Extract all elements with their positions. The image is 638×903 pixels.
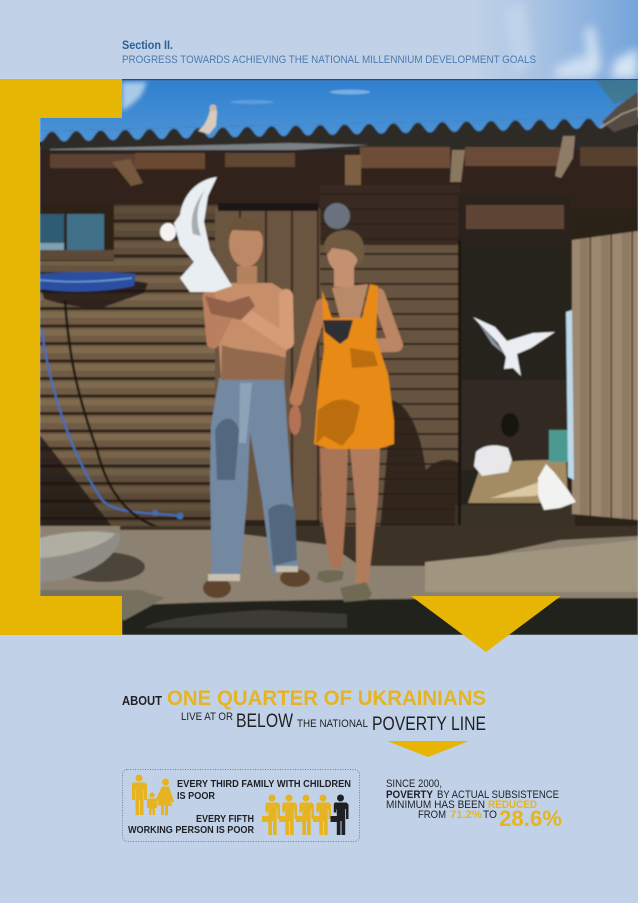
yellow bracket frame	[0, 79, 122, 635]
doorway interior	[455, 195, 575, 527]
text block: poverty reduction: POVERTY	[386, 789, 434, 801]
panel: poverty statistics: WORKING PERSON IS POOR	[128, 824, 254, 836]
doves on the floor	[474, 413, 576, 510]
torso	[213, 282, 288, 378]
head	[334, 262, 354, 287]
headline	[122, 687, 486, 735]
man	[203, 217, 310, 598]
small yellow arrow	[387, 741, 469, 757]
header band with sky fade	[0, 0, 638, 79]
text block: poverty reduction: MINIMUM HAS BEEN	[386, 799, 485, 811]
basin	[40, 531, 145, 582]
log wall left	[40, 205, 218, 535]
left dove held aloft	[160, 177, 232, 292]
corrugated roof	[30, 92, 638, 153]
section heading: Section II.	[122, 40, 173, 52]
ground	[40, 526, 638, 635]
dress	[314, 284, 394, 449]
headline: LIVE AT OR	[181, 711, 233, 723]
text block: poverty reduction	[386, 778, 562, 831]
text block: poverty reduction: 28.6%	[499, 806, 562, 831]
headline: ONE QUARTER OF UKRAINIANS	[167, 687, 486, 710]
dove in doorway	[473, 317, 555, 376]
photo: couple with doves in front of a wooden shed	[30, 80, 638, 635]
section heading	[122, 40, 536, 66]
yellow triangle pointer	[411, 596, 561, 652]
hands	[205, 296, 255, 320]
panel: poverty statistics	[122, 770, 360, 842]
section heading: PROGRESS TOWARDS ACHIEVING THE NATIONAL MILLENNIUM DEVELOPMENT GOALS	[122, 54, 536, 66]
woman	[289, 203, 396, 602]
right plank wall	[320, 185, 460, 530]
top dove on the roof	[198, 104, 217, 134]
text block: poverty reduction: BY ACTUAL SUBSISTENCE	[437, 789, 559, 801]
headline: BELOW	[236, 711, 293, 732]
arms	[376, 287, 404, 354]
headline: THE NATIONAL	[297, 718, 368, 730]
jeans	[210, 378, 298, 578]
headline: ABOUT	[122, 693, 162, 708]
window	[40, 205, 114, 261]
open door	[566, 231, 638, 520]
icon: workers	[262, 794, 348, 835]
text block: poverty reduction: SINCE 2000,	[386, 778, 442, 790]
legs	[320, 448, 348, 568]
chest and top	[332, 284, 368, 318]
headline: POVERTY LINE	[372, 714, 486, 735]
shoes	[203, 578, 231, 598]
photo base	[244, 207, 638, 527]
head	[237, 266, 257, 284]
text block: poverty reduction: FROM	[418, 809, 446, 821]
text block: poverty reduction: TO	[483, 809, 497, 821]
sky	[40, 80, 638, 142]
wall shadows and hose	[40, 272, 184, 530]
door behind the couple	[215, 203, 320, 520]
upper beams	[40, 136, 638, 208]
divider line	[122, 79, 638, 80]
panel: poverty statistics: IS POOR	[177, 790, 215, 802]
icon: family	[132, 774, 174, 816]
text block: poverty reduction: 71.2%	[450, 809, 482, 821]
family statistic: EVERY THIRD FAMILY WITH CHILDREN	[177, 778, 351, 790]
sandals	[317, 570, 372, 602]
arms	[209, 297, 229, 342]
text block: poverty reduction: REDUCED	[488, 799, 537, 811]
worker statistic: EVERY FIFTH	[196, 813, 254, 825]
